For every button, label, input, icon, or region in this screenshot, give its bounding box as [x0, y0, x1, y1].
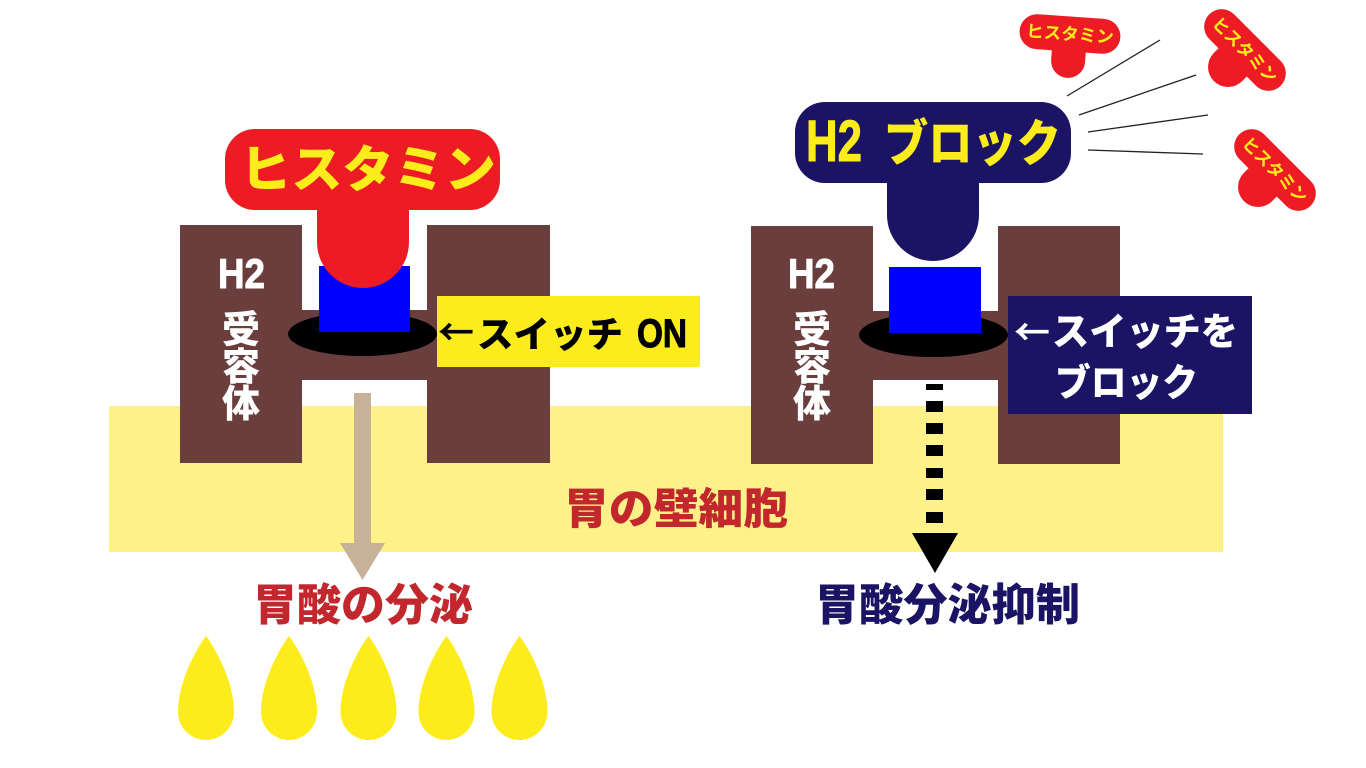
receptor label vertical text (left): [222, 310, 260, 426]
panel: right receptor diagram: [751, 102, 1252, 464]
switch base ellipse (right): [859, 313, 1008, 357]
H2 block text: H2: [806, 109, 862, 174]
label: acid secretion suppressed: 胃酸分泌抑制: [815, 581, 1080, 630]
receptor label H2 (left): H2: [218, 250, 265, 297]
receptor label vertical text (right): 容: [793, 347, 831, 389]
switch on label: ON: [637, 312, 687, 356]
receptor label vertical text (left): 体: [222, 384, 260, 426]
receptor label vertical text (right): 受: [793, 310, 831, 352]
H2 blocker T shape: [795, 102, 1071, 261]
switch on label: スイッチ: [477, 314, 623, 355]
switch on label: ←: [438, 304, 474, 356]
icon: drop 4: [418, 636, 474, 740]
block switch label: ブロック: [1055, 362, 1198, 405]
receptor label vertical text (left): 受: [222, 310, 260, 352]
small histamine 1: [1017, 13, 1122, 81]
H2 block text: [806, 109, 1061, 174]
receptor label H2 (right): H2: [788, 250, 835, 297]
H2 receptor body (left): [180, 225, 550, 463]
small histamine 3: ヒスタミン: [1238, 134, 1311, 207]
H2 block text: ブロック: [884, 116, 1061, 172]
histamine text: ヒスタミン: [240, 142, 496, 198]
block switch label: [1008, 296, 1252, 414]
switch on label: [437, 296, 700, 367]
label: gastric acid secretion: 胃酸の分泌: [253, 581, 473, 630]
small histamine 2: ヒスタミン: [1208, 14, 1281, 87]
histamine T shape: [225, 129, 500, 288]
receptor label vertical text (right): 体: [793, 384, 831, 426]
icons: acid drops: [178, 636, 548, 740]
band: stomach parietal cell: [109, 406, 1223, 552]
label: parietal cell: 胃の壁細胞: [564, 486, 788, 534]
switch base ellipse (left): [288, 312, 437, 356]
switch blue block (right): [889, 267, 981, 333]
block switch label: スイッチを: [1052, 312, 1238, 354]
panel: left receptor diagram: [180, 129, 700, 463]
receptor label vertical text (left): 容: [222, 347, 260, 389]
icon: drop 1: [178, 636, 234, 740]
icon: drop 2: [261, 636, 317, 740]
small histamine 2: [1178, 2, 1293, 117]
icon: drop 5: [492, 636, 548, 740]
receptor label vertical text (right): [793, 310, 831, 426]
arrow: acid secretion: [340, 393, 385, 580]
H2 receptor body (right): [751, 226, 1120, 464]
impact lines: [1067, 40, 1208, 154]
small histamine 3: [1208, 122, 1323, 237]
switch blue block (left): [319, 266, 410, 332]
small histamine 1: ヒスタミン: [1025, 22, 1115, 47]
arrow: suppressed secretion dashed: [912, 384, 958, 573]
icon: drop 3: [340, 636, 396, 740]
block switch label: ←: [1014, 304, 1050, 356]
